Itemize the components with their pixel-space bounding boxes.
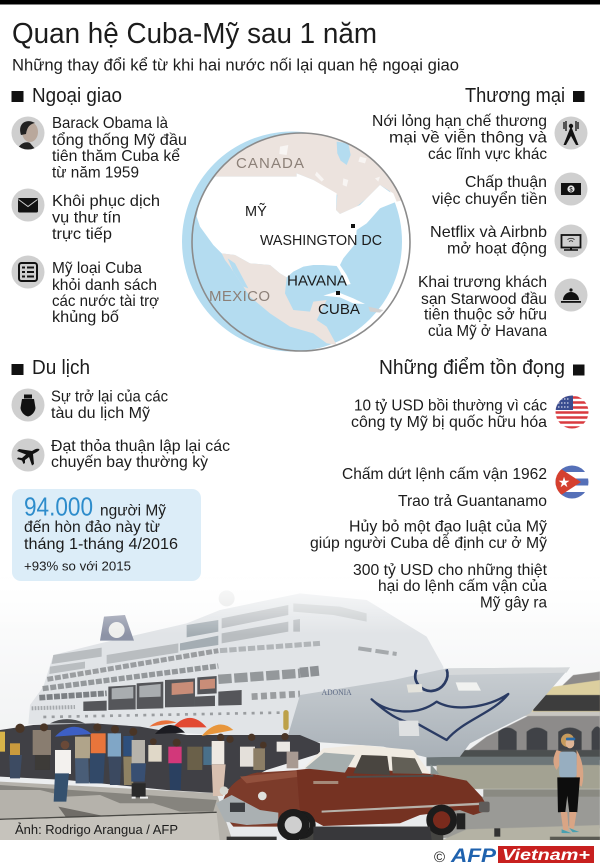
umbrellas — [55, 727, 92, 737]
text: 300 tỷ USD: hại do lệnh cấm vận của — [378, 578, 547, 595]
logo: AFP: AFP — [450, 846, 496, 867]
text: thư tín: Khôi phục dịch — [52, 193, 160, 210]
subtitle: Những thay đổi kể từ khi hai nước nối lại quan hệ ngoại giao — [12, 56, 459, 74]
text: viễn thông: các lĩnh vực khác — [428, 146, 547, 163]
map labels: HAVANA — [287, 274, 347, 290]
logo: Vietnam+ — [498, 846, 594, 864]
text: Guantanamo: Trao trả Guantanamo — [398, 493, 547, 510]
building — [427, 672, 600, 766]
footer logos — [434, 846, 594, 867]
heading: Ngoại giao: Ngoại giao — [32, 85, 122, 107]
icon: antenna tower — [554, 116, 588, 150]
text: Netflix: mở hoạt động — [447, 240, 547, 258]
map labels: CANADA — [236, 155, 304, 172]
crowd — [0, 723, 320, 802]
text: đạo luật — [310, 518, 547, 552]
text: 300 tỷ USD — [353, 562, 548, 612]
panel: Thương mại — [372, 85, 588, 340]
foreground person — [55, 750, 71, 774]
text: bồi thường: công ty Mỹ bị quốc hữu hóa — [351, 414, 547, 431]
text: tàu du lịch: tàu du lịch Mỹ — [51, 405, 150, 422]
callout: 94.000 — [12, 489, 201, 581]
lifeboats — [83, 676, 242, 711]
bumper — [216, 795, 278, 825]
text: danh sách — [52, 260, 159, 326]
text: đạo luật: Hủy bỏ một đạo luật của Mỹ — [349, 518, 547, 536]
classic car — [216, 745, 500, 841]
map labels — [209, 155, 382, 318]
text: Obama: từ năm 1959 — [52, 164, 139, 182]
text: 300 tỷ USD: Mỹ gây ra — [480, 594, 547, 612]
text: thư tín — [52, 193, 160, 243]
text: thư tín: vụ thư tín — [52, 210, 121, 226]
ship upper body — [28, 593, 453, 740]
text: viễn thông — [372, 113, 547, 163]
icon: US flag — [555, 395, 589, 429]
text: danh sách: khủng bố — [52, 309, 119, 326]
text: Obama: Barack Obama là — [52, 115, 168, 132]
text: Starwood: tiên thuộc sở hữu — [424, 306, 547, 324]
map labels: WASHINGTON DC — [260, 233, 382, 249]
icon: cruise ship — [12, 388, 44, 422]
photo: cruise ship Adonia in Havana — [0, 570, 600, 843]
Canada — [215, 134, 401, 214]
text: Obama: tiên thăm Cuba kể — [52, 147, 180, 165]
heading: Du lịch: Du lịch — [32, 357, 90, 379]
text: Starwood — [418, 274, 547, 340]
title: Quan hệ Cuba-Mỹ sau 1 năm — [12, 18, 377, 50]
photo credit: Ảnh: Rodrigo Arangua / AFP — [15, 822, 178, 837]
icon: Obama portrait — [12, 116, 44, 150]
callout: 94.000: đến hòn đảo này từ — [24, 519, 160, 536]
ship upper bands — [49, 603, 367, 674]
icon: television — [554, 224, 588, 258]
icon: service bell — [554, 278, 588, 312]
quay — [437, 765, 600, 842]
icon: envelope — [12, 188, 44, 222]
heads — [15, 723, 289, 748]
text: Obama — [52, 115, 187, 182]
callout: 94.000: +93% so với 2015 — [24, 560, 131, 574]
text: danh sách: các nước tài trợ — [52, 293, 159, 310]
icon: Cuba flag: ★ — [558, 474, 570, 490]
heading: Thương mại: Thương mại — [465, 85, 565, 107]
text: viễn thông: Nới lỏng hạn chế thương — [372, 113, 547, 130]
copyright sign: © — [434, 849, 445, 866]
Mexico — [222, 253, 337, 345]
icon: Cuba flag — [555, 465, 589, 499]
panel: Ngoại giao — [12, 85, 187, 326]
map: North America and Cuba — [182, 130, 420, 352]
panel: Du lịch — [12, 357, 230, 581]
USA — [197, 173, 397, 285]
photo: cruise ship Adonia in Havana: ADONIA — [322, 688, 352, 697]
text: chuyến bay: chuyến bay thường kỳ — [51, 454, 208, 471]
icon: checklist — [12, 256, 44, 288]
text: chuyển tiền: việc chuyển tiền — [432, 190, 547, 208]
text: Obama: tổng thống Mỹ đầu — [52, 131, 187, 149]
Cuba — [323, 292, 365, 304]
icon: banknote: $ — [569, 188, 573, 194]
text: Netflix: Netflix và Airbnb — [430, 224, 547, 241]
text: bồi thường — [351, 398, 547, 431]
top black bar — [0, 0, 600, 4]
woman — [553, 734, 583, 833]
callout: 94.000: người Mỹ — [100, 502, 166, 520]
panel: Những điểm tồn đọng — [310, 357, 589, 612]
text: thư tín: trực tiếp — [52, 226, 112, 243]
text: chuyến bay — [51, 438, 230, 471]
hull — [287, 667, 570, 757]
text: Starwood: Khai trương khách — [418, 274, 547, 291]
text: Starwood: của Mỹ ở Havana — [428, 323, 547, 340]
window rows — [32, 643, 397, 717]
text: tàu du lịch — [51, 388, 168, 422]
callout: 94.000: tháng 1-tháng 4/2016 — [24, 536, 178, 553]
text: bồi thường: 10 tỷ USD bồi thường vì các — [354, 398, 547, 414]
road — [0, 782, 233, 843]
text: chuyển tiền — [432, 174, 547, 208]
text: cấm vận 1962: Chấm dứt lệnh cấm vận 1962 — [342, 466, 547, 483]
map labels: MỸ — [245, 203, 267, 220]
callout: 94.000: 94.000 — [24, 492, 93, 522]
text: viễn thông: mại về viễn thông và — [389, 128, 547, 146]
text: chuyển tiền: Chấp thuận — [465, 174, 547, 191]
text: đạo luật: giúp người Cuba dễ định cư ở Mỹ — [310, 533, 547, 552]
heading: Những điểm tồn đọng: Những điểm tồn đọng — [379, 357, 565, 379]
logo: Vietnam+: Vietnam+ — [502, 847, 590, 864]
text: Netflix — [430, 224, 547, 258]
icon: banknote — [554, 172, 588, 206]
text: tàu du lịch: Sự trở lại của các — [51, 388, 168, 406]
text: chuyến bay: Đạt thỏa thuận lập lại các — [51, 438, 230, 455]
text: danh sách: khỏi danh sách — [52, 277, 157, 294]
text: Starwood: sạn Starwood đầu — [421, 291, 547, 308]
icon: airplane — [12, 438, 44, 472]
text: danh sách: Mỹ loại Cuba — [52, 260, 142, 277]
map labels: CUBA — [318, 302, 360, 318]
text: 300 tỷ USD: 300 tỷ USD cho những thiệt — [353, 562, 548, 579]
map labels: MEXICO — [209, 288, 270, 305]
